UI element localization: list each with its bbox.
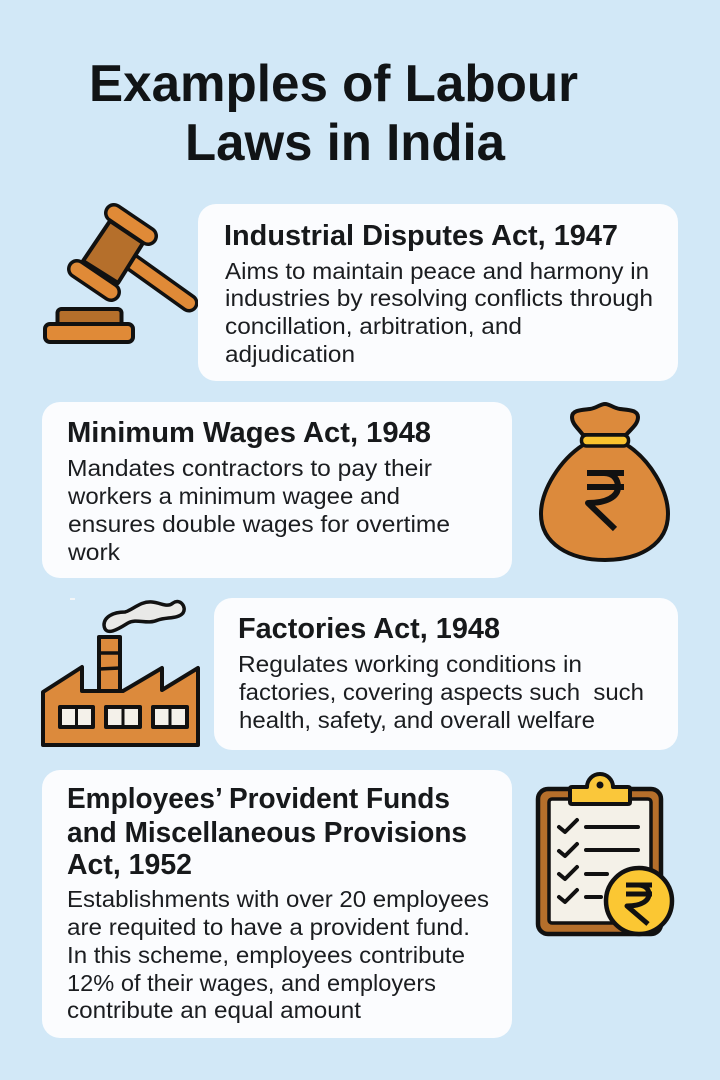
text: Employees' Provident Funds description: 12% of their wages, and employers xyxy=(67,970,436,996)
panel: Minimum Wages Act xyxy=(42,402,512,578)
text: Industrial Disputes Act description: Aims to maintain peace and harmony in xyxy=(225,258,649,284)
text: Minimum Wages Act description: work xyxy=(67,539,120,565)
heading: Minimum Wages Act: Minimum Wages Act, 1948 xyxy=(67,417,431,449)
title: Examples of Labour xyxy=(89,55,578,113)
heading: Employees' Provident Funds Act: Act, 1952 xyxy=(67,849,192,881)
heading: Factories Act: Factories Act, 1948 xyxy=(238,613,500,645)
title: Laws in India xyxy=(185,114,506,172)
icon: gavel xyxy=(45,213,189,342)
panel: Employees' Provident Funds Act xyxy=(42,770,512,1038)
text: Industrial Disputes Act description: adjudication xyxy=(225,341,355,367)
text: Industrial Disputes Act description: industries by resolving conflicts through xyxy=(225,285,653,311)
text: Minimum Wages Act description xyxy=(67,455,450,565)
text: Employees' Provident Funds description xyxy=(67,886,489,1023)
heading: Employees' Provident Funds Act: Employees’ Provident Funds xyxy=(67,783,450,815)
text: Minimum Wages Act description: ensures double wages for overtime xyxy=(68,511,450,537)
text: Factories Act description xyxy=(238,651,644,733)
heading: Industrial Disputes Act: Industrial Disputes Act, 1947 xyxy=(224,220,618,252)
text: Industrial Disputes Act description xyxy=(225,258,653,367)
heading: Employees' Provident Funds Act: and Miscellaneous Provisions xyxy=(67,817,467,849)
text: Factories Act description: factories, covering aspects such such xyxy=(239,679,644,705)
text: Employees' Provident Funds description: are requited to have a provident fund. xyxy=(67,914,470,940)
text: Minimum Wages Act description: Mandates contractors to pay their xyxy=(67,455,432,481)
panel: Industrial Disputes Act xyxy=(198,204,678,381)
text: Industrial Disputes Act description: concillation, arbitration, and xyxy=(225,313,522,339)
text: Minimum Wages Act description: workers a minimum wagee and xyxy=(67,483,400,509)
title xyxy=(89,55,578,172)
text: Employees' Provident Funds description: contribute an equal amount xyxy=(67,997,361,1023)
text: Factories Act description: health, safety, and overall welfare xyxy=(239,707,595,733)
text: Factories Act description: Regulates working conditions in xyxy=(238,651,582,677)
icon: clipboard with rupee coin xyxy=(538,774,672,934)
text: Employees' Provident Funds description: Establishments with over 20 employees xyxy=(67,886,489,912)
heading: Employees' Provident Funds Act xyxy=(67,783,467,881)
icon: money bag with rupee xyxy=(541,404,668,560)
panel: Factories Act xyxy=(214,598,678,750)
text: Employees' Provident Funds description: In this scheme, employees contribute xyxy=(67,942,465,968)
icon: factory xyxy=(43,598,198,745)
